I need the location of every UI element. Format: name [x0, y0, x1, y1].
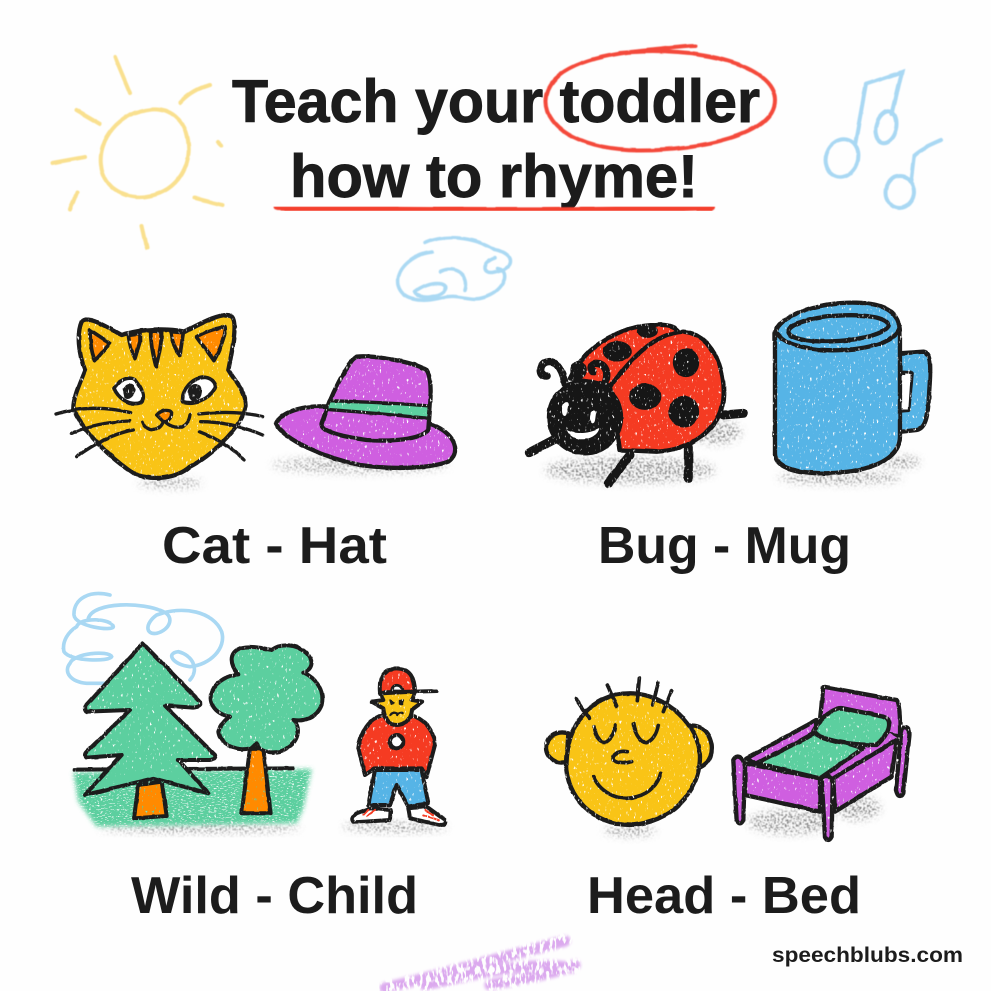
shadow: bug and mug: [545, 420, 920, 484]
face: [562, 402, 599, 439]
icon: mug: [775, 303, 930, 473]
red underline: [277, 207, 712, 210]
decoration: blue cloud: [398, 238, 510, 300]
icon: cat: [56, 315, 263, 478]
label: Head - Bed: Head - Bed: [587, 867, 861, 925]
icon: head: [546, 678, 712, 825]
icon: trees: [74, 643, 322, 818]
title: how to rhyme!: [290, 143, 698, 210]
label: Bug - Mug: Bug - Mug: [598, 517, 851, 575]
shadow: cat and hat: [138, 457, 448, 488]
panel: bug and mug: [529, 303, 930, 484]
shadow: head and bed: [604, 796, 880, 836]
panel: cat and hat: [56, 315, 455, 488]
spots: [570, 325, 699, 427]
panel: head and bed: [546, 678, 909, 840]
decoration: purple crayon scribble: [385, 941, 575, 988]
icon: grass: [73, 769, 312, 827]
icon: child: [352, 668, 445, 825]
icon: ladybug: [529, 325, 743, 483]
decoration: music notes: [820, 72, 941, 208]
decoration: blue scribble cloud: [64, 594, 223, 683]
panel: wild and child: [64, 594, 447, 833]
icon: bed: [733, 687, 909, 840]
icon: hat: [276, 356, 455, 468]
decoration: yellow sun: [52, 57, 222, 248]
label: Wild - Child: Wild - Child: [131, 867, 418, 925]
red circle around toddler: [546, 46, 775, 150]
website credit: speechblubs.com: [772, 944, 963, 967]
shadow: ground: [100, 822, 447, 833]
title: Teach your toddler: [232, 68, 760, 135]
title: [232, 68, 760, 210]
legs: [529, 413, 743, 483]
label: Cat - Hat: Cat - Hat: [162, 517, 387, 575]
